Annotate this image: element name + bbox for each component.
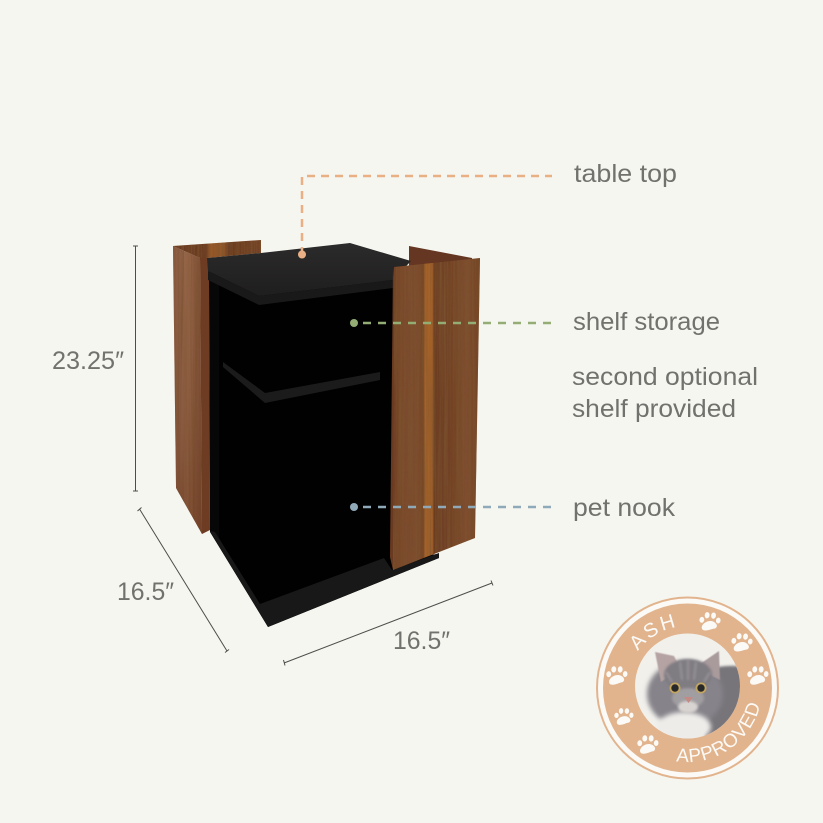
callout: pet nook leader [350, 503, 552, 511]
table top surface [207, 243, 411, 296]
cat head fur [647, 661, 723, 727]
callout: second shelf note: second optional [572, 363, 758, 391]
badge text: APPROVED: APPROVED [676, 703, 759, 762]
right panel inner edge [390, 267, 396, 570]
cat body [704, 664, 740, 736]
cat ears [655, 651, 720, 682]
left panel inner strip [200, 258, 210, 534]
badge text: ASH: ASH [632, 614, 674, 651]
cat forehead stripes [666, 660, 710, 682]
right panel back edge [409, 246, 472, 268]
side table product [173, 240, 480, 627]
cat chest [657, 712, 711, 742]
black cabinet body [209, 270, 439, 627]
dimension line: depth [138, 508, 229, 652]
badge outer ring [597, 598, 778, 778]
dimension: depth value: 16.5″ [117, 578, 174, 606]
cat cheeks [672, 688, 704, 708]
left panel back edge [173, 240, 261, 258]
callout: second shelf note [572, 363, 758, 423]
plinth base [210, 531, 439, 627]
callout: shelf storage leader [350, 319, 552, 327]
callout: second shelf note: shelf provided [572, 395, 736, 423]
right panel front face [393, 258, 480, 570]
right panel [390, 258, 480, 570]
cat photo [635, 634, 740, 738]
cat nose [684, 697, 693, 703]
callout: table top leader [298, 176, 552, 258]
badge: Ash approved [596, 596, 779, 780]
inner shelf [223, 362, 380, 403]
dimension line: width [284, 580, 493, 666]
cat eyes [670, 682, 706, 694]
cat muzzle [678, 701, 698, 713]
badge tan band [603, 604, 772, 772]
dimension: height value: 23.25″ [52, 347, 124, 375]
callout: table top label: table top [574, 160, 677, 188]
table top edge [208, 271, 393, 305]
callout: shelf storage label: shelf storage [573, 308, 720, 336]
body inner left shadow strip [209, 275, 219, 540]
callout: pet nook label: pet nook [573, 494, 676, 522]
left panel front face [173, 246, 202, 534]
dimension: width value: 16.5″ [393, 627, 450, 655]
dimension line: height [133, 246, 138, 491]
cat forehead [662, 658, 713, 680]
paw icons [605, 611, 769, 755]
